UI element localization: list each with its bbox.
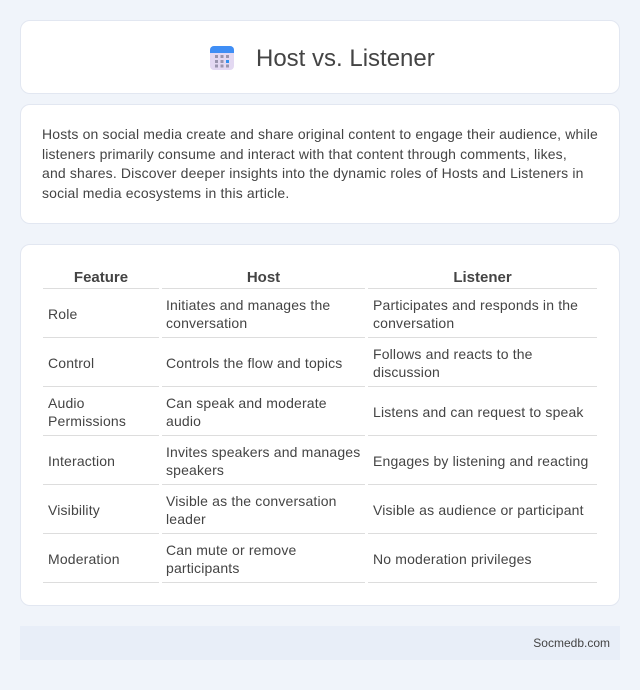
panel: comparison table: Initiates and manages the xyxy=(166,297,330,313)
intro paragraph: Hosts on social media create and share original content to engage their audience, while xyxy=(42,126,598,142)
row: Visibility xyxy=(48,493,584,527)
intro paragraph: social media ecosystems in this article. xyxy=(42,185,289,201)
panel: comparison table: Permissions xyxy=(48,413,126,429)
table header: Host: Host xyxy=(247,269,280,286)
panel: comparison table: audio xyxy=(166,413,201,429)
panel: comparison table: Moderation xyxy=(48,551,120,567)
intro paragraph: and shares. Discover deeper insights into the dynamic roles of Hosts and Listeners in xyxy=(42,165,584,181)
panel: comparison table: leader xyxy=(166,511,206,527)
panel: comparison table: speakers xyxy=(166,462,224,478)
row: Role xyxy=(48,297,578,331)
intro paragraph: listeners primarily consume and interact with that content through comments, likes, xyxy=(42,146,567,162)
icon: calendar xyxy=(210,46,234,70)
panel: comparison table: Follows and reacts to the xyxy=(373,346,533,362)
panel: comparison table: Interaction xyxy=(48,453,115,469)
title: Host vs. Listener xyxy=(256,45,435,72)
panel: comparison table: Can speak and moderate xyxy=(166,395,327,411)
panel: comparison table: Audio xyxy=(48,395,85,411)
panel: comparison table: Visible as audience or participant xyxy=(373,502,584,518)
panel: comparison table: Can mute or remove xyxy=(166,542,296,558)
panel: comparison table: Control xyxy=(48,355,94,371)
footer credit: Socmedb.com xyxy=(533,636,610,650)
panel: comparison table: Role xyxy=(48,306,77,322)
panel: comparison table: conversation xyxy=(373,315,454,331)
panel: comparison table: conversation xyxy=(166,315,247,331)
panel: intro text xyxy=(20,104,620,224)
panel: comparison table xyxy=(20,244,620,606)
panel: comparison table: Participates and responds in the xyxy=(373,297,578,313)
table header: Listener: Listener xyxy=(453,269,512,286)
footer bar xyxy=(20,626,620,660)
panel: comparison table: Invites speakers and manages xyxy=(166,444,360,460)
panel: comparison table: Engages by listening and reacting xyxy=(373,453,588,469)
intro paragraph xyxy=(42,126,598,201)
panel: comparison table: participants xyxy=(166,560,240,576)
row: Interaction xyxy=(48,444,588,478)
panel: comparison table: No moderation privileges xyxy=(373,551,532,567)
panel: comparison table: Listens and can request to speak xyxy=(373,404,584,420)
panel: comparison table: Visible as the conversation xyxy=(166,493,337,509)
panel: comparison table: Visibility xyxy=(48,502,100,518)
panel: title card xyxy=(20,20,620,94)
panel: comparison table: discussion xyxy=(373,364,440,380)
table header: Feature: Feature xyxy=(74,269,128,286)
row: Control xyxy=(48,346,533,380)
row: Moderation xyxy=(48,542,532,576)
panel: comparison table: Controls the flow and topics xyxy=(166,355,342,371)
row: Audio Permissions xyxy=(48,395,584,429)
